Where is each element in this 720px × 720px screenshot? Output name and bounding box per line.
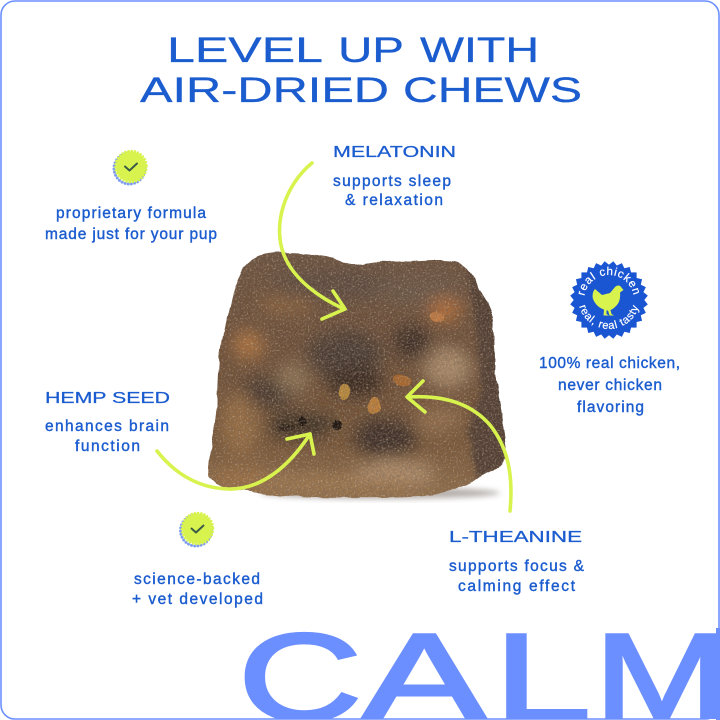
big word: calm — [244, 632, 716, 719]
chew photo illustration — [200, 245, 515, 505]
arrow: melatonin — [280, 163, 345, 319]
title: LEVEL — [167, 31, 323, 70]
icon: real chicken badge: real, real tasty — [579, 304, 640, 330]
icon: real chicken badge: real chicken — [578, 266, 639, 296]
text: real chicken — [539, 355, 680, 416]
orange flecks — [339, 312, 445, 414]
text: hemp seed: HEMP SEED — [45, 390, 170, 407]
arrow: l-theanine — [407, 381, 511, 511]
text: science-backed: + vet developed — [132, 591, 263, 608]
text: real chicken: 100% real chicken, — [539, 355, 680, 372]
icon: check badge formula — [114, 151, 146, 184]
icon: chicken — [593, 286, 624, 316]
text: l-theanine: supports focus & — [449, 558, 585, 575]
text: l-theanine: L-THEANINE — [449, 529, 582, 546]
icon: check badge vet — [180, 513, 213, 546]
text: hemp seed — [45, 390, 170, 455]
title — [140, 31, 582, 110]
text: l-theanine: calming effect — [458, 578, 576, 595]
text: melatonin: supports sleep — [333, 173, 451, 190]
arrow: hemp seed — [157, 434, 314, 489]
text: melatonin — [333, 144, 456, 209]
text: proprietary formula — [45, 205, 217, 243]
text: real chicken: never chicken — [558, 377, 662, 394]
text: melatonin: & relaxation — [345, 192, 443, 209]
text: proprietary formula: proprietary formula — [56, 205, 206, 222]
text: real chicken: flavoring — [577, 399, 644, 416]
title: CHEWS — [403, 71, 582, 110]
shadow under chew — [260, 487, 500, 499]
text: proprietary formula: made just for your pup — [45, 226, 217, 243]
title: AIR-DRIED — [140, 71, 389, 110]
title: WITH — [420, 31, 539, 70]
text: hemp seed: enhances brain — [45, 418, 169, 435]
right dark face — [465, 268, 506, 480]
text: science-backed: science-backed — [134, 571, 260, 588]
title: UP — [338, 31, 404, 70]
text: l-theanine — [449, 529, 585, 595]
pores — [278, 416, 342, 432]
icon: real chicken badge — [570, 261, 648, 339]
right edge band beside M — [716, 628, 720, 720]
text: melatonin: MELATONIN — [333, 144, 456, 161]
text: hemp seed: function — [75, 438, 140, 455]
text: science-backed — [132, 571, 263, 608]
